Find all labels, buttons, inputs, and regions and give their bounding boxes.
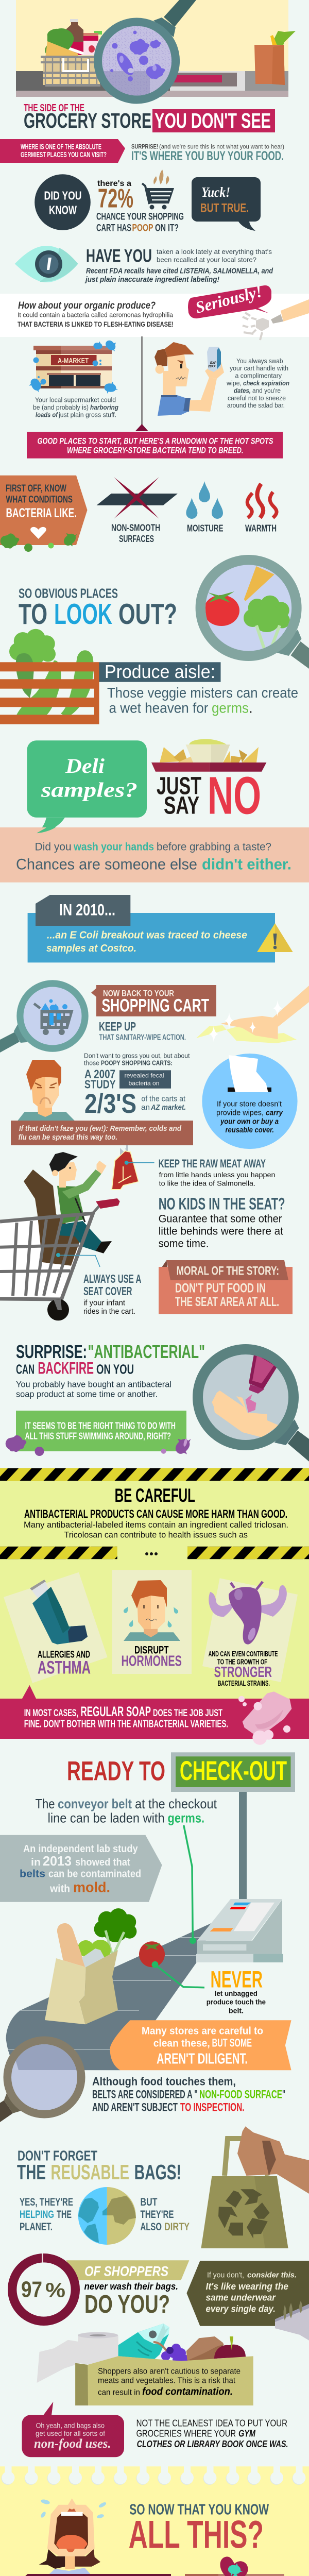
ribbon: many stores are careful: BUT SOME [212, 2036, 252, 2049]
heading: so obvious places to look out: OUT? [118, 598, 177, 631]
icon: magnifier over hand and soap [193, 1344, 309, 1462]
icon: nachos and dip [151, 739, 266, 772]
text: helping the planet: THE [57, 2209, 72, 2221]
panel: produce aisle: germs [212, 700, 249, 716]
icon: moisture drops [186, 481, 224, 533]
speech bubble: deli samples [27, 740, 147, 833]
illustration: food in box [37, 2324, 253, 2405]
speech bubble: yuck but true: Yuck! [201, 184, 230, 200]
text: gym clothes or library book [136, 2418, 288, 2449]
panel: right thing to do: ALL THIS STUFF SWIMMING AROUND, RIGHT? [25, 1430, 171, 1441]
text: poopy carts study: A 2007 [84, 1067, 115, 1080]
text block: you always swab [226, 357, 289, 409]
speech bubble: seriously: Seriously! [194, 282, 264, 317]
panel: tissue box circle: reusable cover. [226, 1126, 274, 1134]
text: non-food surface: BELTS ARE CONSIDERED A " [92, 2088, 198, 2101]
caption: local supermarket [33, 396, 118, 419]
speech bubble: deli samples: Deli [65, 754, 105, 777]
heading: so obvious places to look out: LOOK [54, 598, 112, 631]
panel: organic produce: THAT BACTERIA IS LINKED TO FLESH-EATING DISEASE! [18, 320, 174, 328]
text: never wash bags do you: never wash their bags. [84, 2281, 178, 2292]
speech bubble: non-food uses: Oh yeah, and bags also [36, 2421, 105, 2429]
text: conveyor belt germs: conveyor belt [58, 1796, 132, 1811]
text: but they're also dirty: DIRTY [164, 2221, 190, 2233]
icon: man checking milk carton [154, 342, 224, 416]
panel: faze you colds and flu: If that didn't faze you (ew!): Remember, colds and [19, 1125, 182, 1133]
card: stronger bacterial strains: TO THE GROWTH OF [217, 1658, 267, 1666]
statistic: 72 percent: POOP [132, 223, 153, 234]
heading: ready to check-out sign [67, 1752, 295, 1899]
panel: produce aisle: . [249, 700, 253, 716]
text: shoppers also aren't cautious: Shoppers also aren't cautious to separate [98, 2367, 241, 2376]
icon: hand wiping with cloth [196, 986, 309, 1043]
heading: reusable bags [17, 2147, 181, 2184]
text: never let unbagged produce: belt. [229, 2006, 244, 2014]
text: poopy carts study: an [141, 1104, 150, 1112]
icon: grocery basket [41, 19, 102, 87]
statistic: 72 percent: 72% [98, 183, 133, 213]
panel: faze you colds and flu [11, 1121, 193, 1145]
icon: half clean half dirty globe [78, 2187, 136, 2245]
card: stronger bacterial strains: STRONGER [214, 1664, 272, 1681]
panel: same underwear: every single day. [206, 2303, 276, 2314]
text: just say no: JUST [157, 772, 201, 800]
did you know badge [35, 174, 91, 230]
heading: now back to your shopping cart: SHOPPING CART [102, 995, 209, 1015]
text: shoppers also aren't cautious: can result in [98, 2388, 140, 2397]
card: disrupt hormones [112, 1570, 192, 1674]
panel: same underwear: If you don't, [207, 2272, 244, 2280]
text block: it's where you buy your food [131, 143, 284, 163]
ribbon: of shoppers: OF SHOPPERS [84, 2263, 168, 2279]
ribbon: many stores are careful: Many stores are careful to [142, 2025, 263, 2037]
ribbon: many stores are careful: AREN'T DILIGENT. [157, 2051, 248, 2067]
icon: market with germ heart [185, 2556, 284, 2576]
icon: man checking milk carton: EXP [210, 362, 217, 365]
text: never let unbagged produce: produce touch the [207, 1998, 266, 2006]
panel: organic produce: It could contain a bacteria called aeromonas hydrophilia [18, 312, 173, 319]
banner: regular soap: REGULAR SOAP [80, 1704, 151, 1719]
panel: wash your hands: didn't either. [202, 856, 291, 873]
callout: where is the germiest place: GERMIEST PLACES YOU CAN VISIT? [21, 151, 107, 159]
panel: wash your hands: wash your hands [73, 841, 154, 853]
speech bubble: deli samples: samples? [41, 778, 138, 802]
panel: same underwear: It's like wearing the [206, 2281, 288, 2292]
panel: tissue box circle: provide wipes, [216, 1109, 264, 1117]
icon: magnifying glass with germs [94, 0, 196, 104]
callout: lab study mold: 2013 [43, 1853, 72, 1869]
icon: raw meat [111, 1145, 154, 1190]
text: no kids in the seat [159, 1195, 285, 1249]
panel: tissue box circle: your own or buy a [220, 1117, 279, 1126]
card: allergies and asthma [4, 1572, 108, 1683]
text: non-food surface: Although food touches them, [92, 2075, 236, 2088]
panel: right thing to do: IT SEEMS TO BE THE RIGHT THING TO DO WITH [25, 1420, 176, 1431]
text: keep up sanitary wipe: THAT SANITARY-WIPE ACTION. [99, 1033, 186, 1042]
panel: in 2010 e coli: IN 2010... [59, 901, 115, 919]
callout: lab study mold: belts [20, 1868, 45, 1879]
card: stronger bacterial strains [202, 1578, 298, 1688]
panel: in 2010 e coli: ...an E Coli breakout was traced to cheese [47, 930, 247, 941]
icon: steaming shopping cart [142, 170, 174, 209]
text: but they're also dirty [140, 2196, 190, 2233]
illustration: conveyor belt and register [6, 1899, 283, 2070]
heading: antibacterial can backfire: SURPRISE: [16, 1341, 87, 1362]
heading: now back to your shopping cart: NOW BACK TO YOUR [103, 988, 174, 998]
text: non-food surface: " [282, 2088, 285, 2101]
panel: same underwear: same underwear [206, 2293, 276, 2303]
caption: local supermarket: just plain gross stuff. [58, 411, 116, 419]
panel: be careful warning: Many antibacterial-labeled items contain an ingredient called triclosan. [24, 1520, 288, 1530]
chart: 97 percent donut: % [45, 2279, 65, 2301]
heading: so obvious places to look out: TO [19, 598, 47, 631]
icon: divider triangle [135, 424, 148, 431]
panel: produce aisle [99, 661, 298, 716]
heading: reusable bags: BAGS! [134, 2160, 181, 2184]
text: helping the planet [20, 2196, 73, 2233]
text: poopy carts study: revealed fecal [125, 1072, 164, 1079]
text: poopy carts study: Don't want to gross you out, but about [84, 1052, 190, 1059]
text: conveyor belt germs: at the checkout [135, 1796, 217, 1811]
speech bubble: non-food uses: get used for all sorts of [36, 2430, 105, 2437]
icon: magnifier over produce [196, 555, 309, 669]
text: just say no: NO [208, 766, 261, 825]
ribbon: of shoppers [66, 2260, 189, 2280]
caption: local supermarket: be (and probably is) [33, 403, 89, 411]
banner: regular soap: IN MOST CASES, [24, 1707, 78, 1719]
panel: wash your hands [0, 827, 309, 883]
text: shoppers also aren't cautious: food contamination. [142, 2386, 233, 2397]
heading: antibacterial can backfire: CAN [16, 1362, 35, 1377]
icon: warmth [245, 484, 277, 533]
text: poopy carts study [84, 1052, 190, 1119]
text: non-food surface: TO INSPECTION. [180, 2101, 245, 2114]
speech bubble: non-food uses [22, 2402, 124, 2457]
icon: eye [15, 246, 78, 282]
text: never wash bags do you: DO YOU? [84, 2291, 170, 2318]
text: never let unbagged produce: NEVER [211, 1966, 263, 1992]
icon: grossed-out man [18, 1060, 75, 1121]
panel: produce aisle: a wet heaven for [109, 700, 208, 716]
title [24, 102, 275, 132]
panel: in 2010 e coli [28, 895, 293, 962]
icon: non-smooth surfaces [97, 477, 178, 544]
caption: local supermarket: harboring [90, 403, 118, 411]
text: keep the raw meat away [159, 1157, 275, 1188]
text: non-food surface [92, 2075, 285, 2114]
card: disrupt hormones: DISRUPT [134, 1644, 169, 1656]
heading: reusable bags: THE [17, 2160, 46, 2184]
speech bubble: yuck but true [192, 177, 261, 231]
text block: you always swab: check expiration [243, 379, 289, 387]
panel: conditions bacteria like: BACTERIA LIKE. [6, 506, 77, 520]
text block: have you looked at recalls: taken a look lately at everything that's [157, 248, 272, 256]
heading: antibacterial can backfire: BACKFIRE [38, 1359, 94, 1378]
text: keep the raw meat away: to like the idea of Salmonella. [159, 1179, 255, 1188]
chart: 97 percent donut [12, 2253, 75, 2321]
text: helping the planet: HELPING [20, 2209, 54, 2221]
panel: produce aisle: Produce aisle: [105, 661, 215, 682]
heading: antibacterial can backfire: "ANTIBACTERIAL" [88, 1341, 205, 1362]
title: THE SIDE OF THE [24, 102, 84, 114]
callout: lab study mold: in [31, 1857, 41, 1868]
text block: it's where you buy your food: SURPRISE! [131, 143, 158, 150]
callout: no need to panic [21, 2574, 171, 2576]
text block: you always swab: around the salad bar. [227, 401, 285, 409]
text: conveyor belt germs: line can be laden with [48, 1810, 165, 1825]
statistic: 72 percent: CART HAS [96, 223, 131, 234]
icon: magnifier over belt [0, 2036, 85, 2122]
panel: conditions bacteria like: FIRST OFF, KNOW [6, 483, 66, 494]
text block: you always swab: your cart handle with [230, 364, 288, 372]
heading: reusable bags: REUSABLE [50, 2160, 129, 2184]
icon: non-smooth surfaces: SURFACES [119, 534, 154, 544]
heading: so obvious places to look out [19, 586, 177, 631]
panel: yellow notepad section [0, 2466, 309, 2576]
icon: man checking milk carton: 20XX [208, 365, 216, 368]
callout: where is the germiest place [0, 139, 125, 163]
panel: same underwear [186, 2261, 309, 2341]
icon: germ-covered supermarket: A-MARKET [58, 357, 89, 365]
text: poopy carts study: STUDY [84, 1077, 116, 1091]
text: always use a seat cover: if your infant [83, 1299, 125, 1307]
text: poopy carts study: POOPY SHOPPING CARTS: [101, 1059, 173, 1066]
heading: so now that you know all this [129, 2502, 269, 2557]
callout: lab study mold: mold. [73, 1879, 110, 1895]
card: allergies and asthma: ASTHMA [38, 1657, 91, 1677]
heading: reusable bags: DON'T FORGET [18, 2147, 97, 2163]
text: never let unbagged produce [207, 1966, 266, 2014]
text: shoppers also aren't cautious: meats and vegetables. This is a risk that [98, 2376, 236, 2385]
panel: conditions bacteria like [0, 476, 88, 552]
text: always use a seat cover: SEAT COVER [83, 1284, 132, 1298]
text: helping the planet: PLANET. [20, 2221, 53, 2233]
text: keep up sanitary wipe [99, 1020, 186, 1042]
panel: tissue box circle [202, 1054, 298, 1149]
caption: local supermarket: Your local supermarket could [35, 396, 116, 404]
panel: right thing to do [6, 1411, 196, 1458]
text block: have you looked at recalls: been recalled at your local store? [157, 256, 256, 264]
text block: have you looked at recalls: HAVE YOU [86, 246, 152, 266]
panel: same underwear: consider this. [247, 2272, 297, 2280]
icon: produce crate [0, 629, 99, 724]
banner: hot spots: WHERE GROCERY-STORE BACTERIA TEND TO BREED. [67, 446, 243, 455]
text: keep the raw meat away: from little hands unless you happen [159, 1171, 275, 1179]
text: always use a seat cover [83, 1272, 141, 1316]
panel: wash your hands: Chances are someone else [16, 856, 197, 873]
icon: paper bag of groceries [45, 1908, 136, 2024]
panel: conditions bacteria like: WHAT CONDITIONS [6, 495, 73, 505]
panel: faze you colds and flu: flu can be spread this way too. [19, 1133, 117, 1142]
arrow: green pointer line [151, 1825, 204, 1988]
panel: hero illustration [16, 0, 296, 104]
text block: you always swab: and you're [252, 386, 281, 394]
text block: you always swab: wipe, [226, 379, 242, 387]
icon: hand holding reusable bag [201, 2126, 309, 2248]
panel: tissue box circle: carry [266, 1109, 283, 1117]
text: helping the planet: YES, THEY'RE [20, 2196, 73, 2208]
text: but they're also dirty: THEY'RE [140, 2209, 174, 2221]
text: no kids in the seat: some time. [159, 1238, 209, 1249]
callout: where is the germiest place: WHERE IS ONE OF THE ABSOLUTE [21, 143, 101, 151]
panel: in 2010 e coli: samples at Costco. [46, 943, 136, 954]
heading: antibacterial can backfire [16, 1341, 205, 1378]
text: never let unbagged produce: let unbagged [215, 1989, 258, 1997]
text: no kids in the seat: Guarantee that some other [159, 1213, 282, 1225]
icon: screaming woman [39, 2498, 107, 2574]
did you know badge: DID YOU [44, 189, 81, 202]
text: poopy carts study: bacteria on [129, 1079, 160, 1087]
panel: organic produce [0, 294, 309, 337]
heading: now back to your shopping cart [91, 985, 216, 1016]
card: allergies and asthma: ALLERGIES AND [38, 1649, 90, 1660]
icon: germ-covered supermarket [27, 337, 120, 395]
speech bubble: non-food uses: non-food uses. [34, 2437, 111, 2451]
did you know badge: KNOW [49, 204, 77, 217]
panel: be careful warning [0, 1468, 309, 1699]
text: poopy carts study: AZ market. [150, 1104, 186, 1112]
text: conveyor belt germs: germs. [168, 1810, 204, 1825]
panel: wash your hands: before grabbing a taste? [157, 841, 271, 853]
text: antibacterial soap: You probably have bought an antibacteral [16, 1379, 171, 1389]
callout: lab study mold: showed that [75, 1857, 130, 1868]
callout: lab study mold: can be contaminated [48, 1868, 141, 1879]
text: always use a seat cover: ALWAYS USE A [83, 1272, 141, 1285]
panel: tissue box circle: If your store doesn't [217, 1100, 282, 1109]
text block: you always swab: You always swab [236, 357, 283, 365]
heading: antibacterial can backfire: ON YOU [96, 1362, 134, 1377]
icon: moisture drops: MOISTURE [187, 523, 224, 533]
panel: be careful warning: Tricolosan can contribute to health issues such as [64, 1530, 248, 1539]
icon: child in shopping cart [0, 1152, 120, 1320]
text: never wash bags do you [84, 2281, 178, 2318]
text: poopy carts study: of the carts at [141, 1095, 185, 1103]
panel: organic produce: How about your organic produce? [18, 300, 156, 311]
text: but they're also dirty: BUT [140, 2196, 158, 2208]
statistic: 72 percent: ON IT? [155, 223, 179, 234]
divider line [141, 336, 143, 430]
icon: skeleton hand [243, 299, 309, 340]
icon: tomato on belt [139, 1941, 165, 1967]
speech bubble: yuck but true: BUT TRUE. [200, 201, 249, 215]
text: but they're also dirty: ALSO [140, 2221, 162, 2233]
panel: wash your hands: Did you [35, 841, 72, 853]
card: disrupt hormones: HORMONES [122, 1653, 182, 1669]
callout: lab study mold: An independent lab study [23, 1843, 138, 1855]
text: poopy carts study: those [84, 1059, 99, 1066]
text: poopy carts study: 2/3'S [84, 1089, 136, 1119]
ribbon: many stores are careful: clean these, [153, 2038, 210, 2049]
text: just say no [157, 766, 261, 825]
panel: moral of the story [159, 1260, 293, 1314]
text: antibacterial soap [16, 1379, 171, 1399]
text: keep up sanitary wipe: KEEP UP [99, 1020, 136, 1034]
text: gym clothes or library book: GROCERIES WHERE YOUR [136, 2429, 236, 2439]
icon: non-smooth surfaces: NON-SMOOTH [111, 523, 160, 533]
banner: hot spots [27, 432, 283, 459]
statistic: 72 percent: there's a [97, 179, 131, 188]
text block: have you looked at recalls: just plain inaccurate ingredient labeling! [84, 276, 219, 284]
title: GROCERY STORE [24, 109, 151, 132]
banner: regular soap: DOES THE JOB JUST [153, 1707, 222, 1719]
statistic: 72 percent [96, 179, 184, 234]
icon: paper grocery bag [254, 31, 296, 85]
text block: have you looked at recalls: Recent FDA recalls have cited LISTERIA, SALMONELLA, and [86, 267, 273, 276]
icon: warmth: WARMTH [245, 523, 277, 533]
text block: you always swab: dates, [234, 386, 251, 394]
panel: moral of the story: DON'T PUT FOOD IN [175, 1281, 266, 1295]
callout: lab study mold: with [49, 1884, 70, 1895]
text block: you always swab: careful not to sneeze [228, 394, 286, 402]
chart: 97 percent donut: 97 [21, 2277, 42, 2302]
text: shoppers also aren't cautious [98, 2367, 241, 2397]
text block: you always swab: a complimentary [235, 372, 282, 380]
text: non-food surface: AND AREN'T SUBJECT [92, 2101, 178, 2114]
statistic: 72 percent: CHANCE YOUR SHOPPING [96, 211, 184, 223]
banner: regular soap [0, 1685, 309, 1745]
card: stronger bacterial strains: BACTERIAL STRAINS. [218, 1680, 270, 1688]
callout: lab study mold [0, 1835, 162, 1902]
text: always use a seat cover: rides in the cart. [83, 1308, 135, 1316]
heading: so obvious places to look out: SO OBVIOUS PLACES [19, 586, 118, 601]
caption: local supermarket: loads of [36, 411, 58, 419]
text: gym clothes or library book: GYM [238, 2429, 256, 2439]
icon: magnifier over germy cart [0, 980, 89, 1053]
text: just say no: SAY [164, 791, 199, 819]
text: conveyor belt germs [35, 1796, 217, 1825]
panel: be careful warning: BE CAREFUL [115, 1485, 195, 1506]
text: conveyor belt germs: The [35, 1796, 55, 1811]
text: no kids in the seat: little behinds were there at [159, 1225, 283, 1237]
ribbon: many stores are careful [110, 2020, 291, 2070]
heading: ready to check-out sign: READY TO [67, 1756, 165, 1787]
text block: have you looked at recalls [84, 246, 273, 284]
text: antibacterial soap: soap product at some time or another. [16, 1389, 158, 1399]
text block: it's where you buy your food: (and we're sure this is not what you want to hear) [159, 143, 284, 150]
